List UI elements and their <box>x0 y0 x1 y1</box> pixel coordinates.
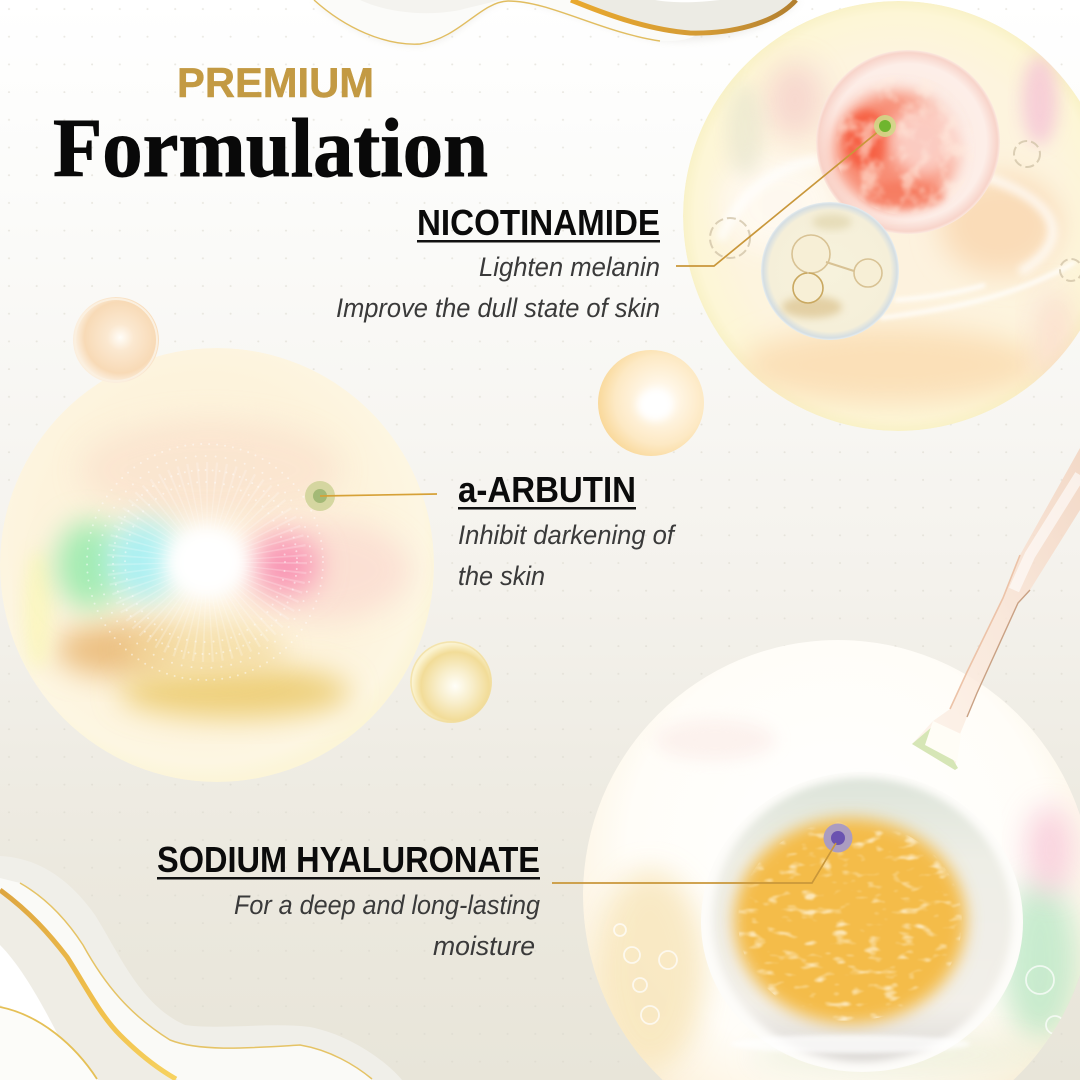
inner sphere <box>701 772 1023 1072</box>
text: nicotinamide description: Lighten melanin <box>479 252 660 282</box>
callout: sodium hyaluronate <box>157 824 852 961</box>
text: sodium description: For a deep and long-lasting <box>234 890 540 920</box>
dropper pipette <box>912 448 1080 770</box>
callout: nicotinamide <box>336 115 896 323</box>
droplet: top left <box>73 297 159 383</box>
heading: arbutin: a-ARBUTIN <box>458 469 636 510</box>
bubble: nicotinamide <box>683 1 1080 431</box>
text: nicotinamide description <box>336 252 660 323</box>
orange sphere <box>816 50 1000 234</box>
leader line <box>676 126 885 266</box>
text: arbutin description <box>458 520 676 591</box>
text: sodium description: moisture <box>433 931 535 961</box>
bubble: arbutin <box>0 348 434 782</box>
marker <box>824 824 852 852</box>
leader line <box>552 843 836 883</box>
leader line <box>320 494 437 496</box>
marker <box>305 481 335 511</box>
text: arbutin description: the skin <box>458 561 545 591</box>
bottom-left cream wave with gold edge <box>0 856 402 1080</box>
top cream wave with gold edge <box>314 0 800 45</box>
droplet: lower <box>410 641 492 723</box>
molecule sphere <box>761 202 899 340</box>
callout: a-arbutin <box>305 469 676 591</box>
marker <box>874 115 896 137</box>
text: sodium description <box>234 890 540 961</box>
droplet: centre <box>598 350 704 456</box>
heading: nicotinamide: NICOTINAMIDE <box>417 202 660 243</box>
text: nicotinamide description: Improve the dull state of skin <box>336 293 660 323</box>
title line: formulation: Formulation <box>53 102 488 195</box>
bubble: sodium hyaluronate <box>583 640 1080 1080</box>
title line: premium: PREMIUM <box>177 59 374 106</box>
text: arbutin description: Inhibit darkening of <box>458 520 676 550</box>
heading: sodium hyaluronate: SODIUM HYALURONATE <box>157 839 540 880</box>
